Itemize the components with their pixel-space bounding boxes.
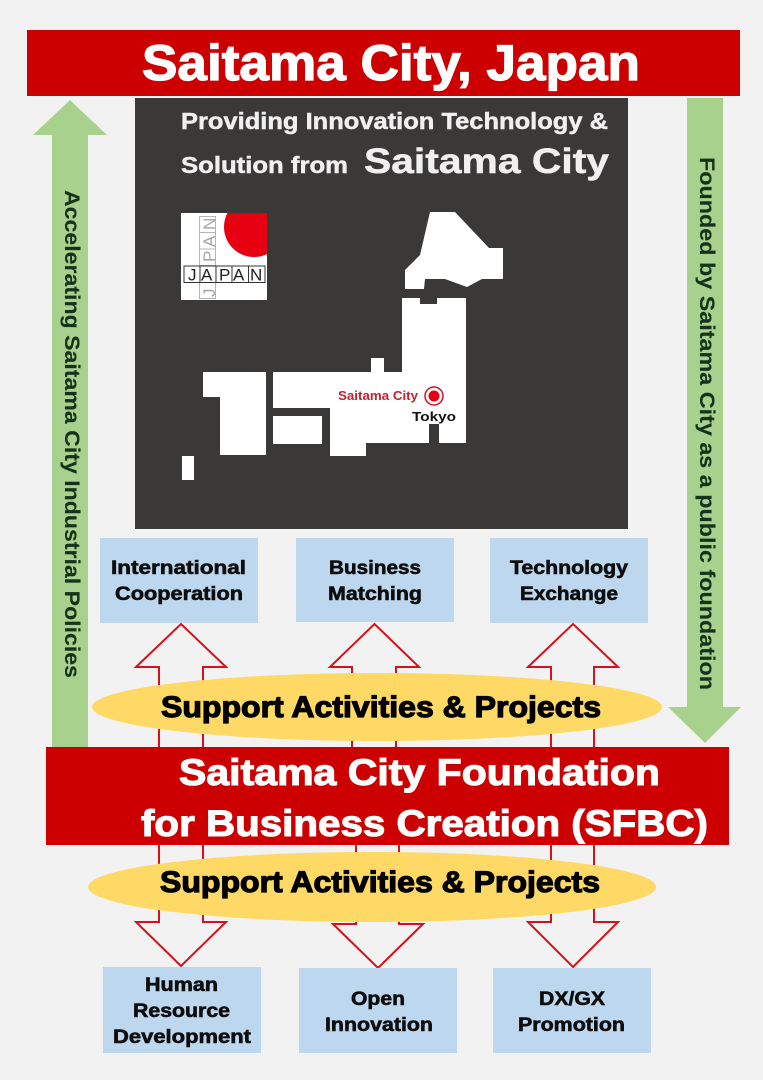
box: Technology Exchange [490,538,648,623]
oval: upper support activities [92,673,662,741]
box: International Cooperation [100,538,258,623]
box: DX/GX Promotion: Promotion [518,1015,625,1036]
map: Kyushu [203,372,266,455]
oval: lower support activities [88,852,656,922]
box: International Cooperation: Cooperation [115,584,243,605]
icon: Japan logo: N [200,218,219,230]
icon: Japan logo: A [233,266,245,284]
icon: Japan logo: P [200,251,219,262]
box: Human Resource Development [103,967,261,1053]
label: Tokyo: Tokyo [412,409,456,424]
arrow: centre two-way [330,624,423,968]
box: Business Matching: Business [329,558,421,579]
box: Open Innovation [299,968,457,1053]
box: Business Matching: Matching [328,584,422,605]
map heading: Saitama City [364,142,610,181]
box: Human Resource Development: Development [113,1027,252,1048]
arrow: right two-way [528,624,618,967]
banner: SFBC: for Business Creation (SFBC) [141,803,708,844]
oval: upper support activities: Support Activities & Projects [161,691,601,724]
icon: Japan logo: A [201,266,213,284]
label: Saitama City: Saitama City [338,389,418,403]
banner: SFBC: Saitama City Foundation [179,752,660,793]
title banner: Saitama City, Japan [142,35,640,91]
map heading: Providing Innovation Technology & [181,108,608,134]
icon: Japan logo: N [250,266,262,284]
box: DX/GX Promotion: DX/GX [539,989,605,1010]
map: Honshu [273,298,466,456]
icon: Japan logo [181,213,267,300]
arrow: left two-way [136,624,226,966]
green arrow: accelerating industrial policies [33,100,107,747]
oval: lower support activities: Support Activities & Projects [160,866,600,899]
box: Open Innovation: Open [351,989,405,1010]
box: International Cooperation: International [111,558,246,579]
title banner [27,30,740,96]
box: Human Resource Development: Resource [133,1001,230,1022]
box: Human Resource Development: Human [145,975,218,996]
map: Shikoku [273,416,322,444]
icon: Japan logo: J [188,266,196,284]
icon: Japan logo: A [200,235,219,247]
box: Technology Exchange: Technology [510,558,628,579]
banner: SFBC [46,747,729,845]
green arrow: founded as a public foundation [668,98,741,743]
box: DX/GX Promotion [493,968,651,1053]
icon: Japan logo: J [200,288,219,297]
green arrow: founded as a public foundation: Founded by Saitama City as a public foundation [695,157,718,690]
map: Hokkaido [405,212,503,289]
icon: Saitama City marker [425,387,443,405]
box: Open Innovation: Innovation [325,1015,433,1036]
map: Okinawa [182,456,194,480]
map heading: Solution from [181,152,348,178]
box: Technology Exchange: Exchange [520,584,618,605]
green arrow: accelerating industrial policies: Accelerating Saitama City Industrial Policies [60,190,83,678]
icon: Japan logo: P [219,266,230,284]
box: Business Matching [296,538,454,622]
panel: map of Japan [135,98,628,529]
map heading [181,108,610,181]
